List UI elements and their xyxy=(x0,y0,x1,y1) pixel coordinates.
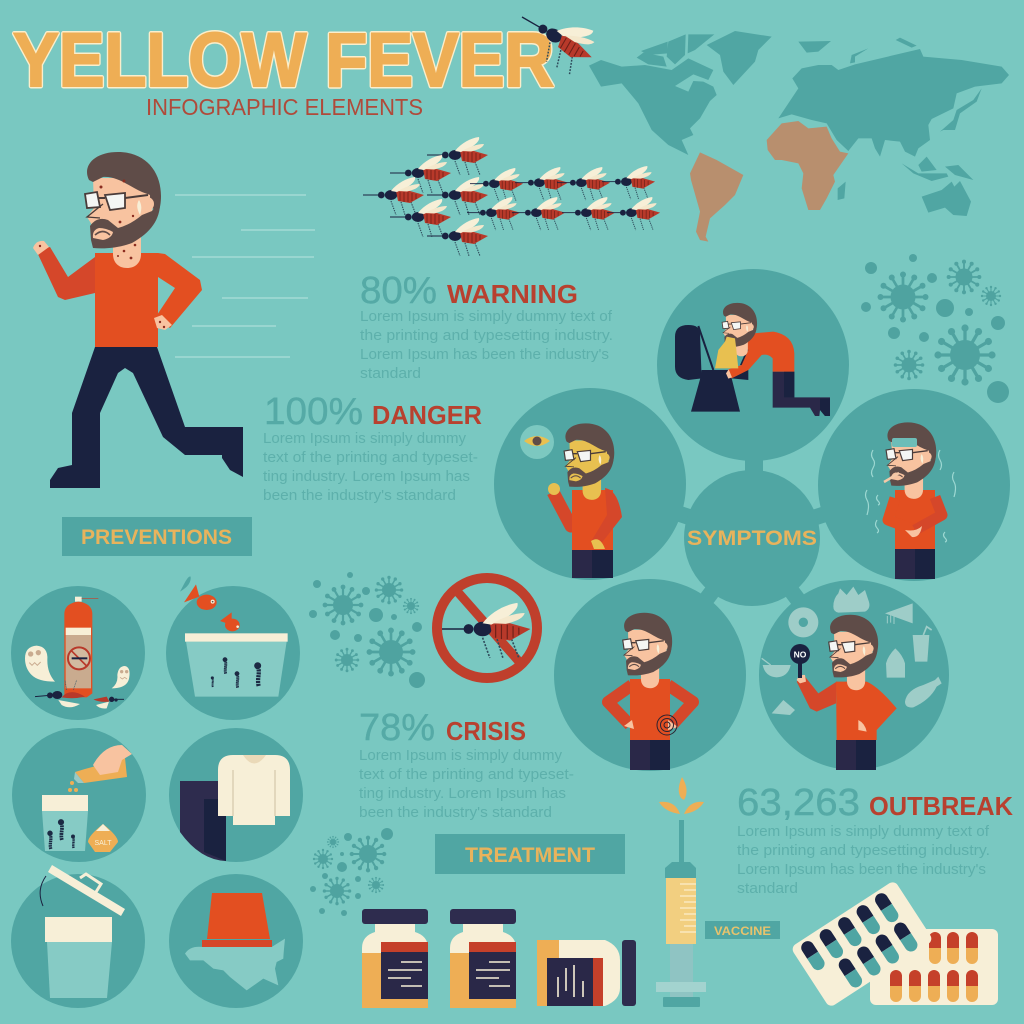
medicine jar 1 xyxy=(362,909,428,1008)
stat: warning: the printing and typesetting industry. xyxy=(360,327,613,344)
stat: crisis: ting industry. Lorem Ipsum has xyxy=(359,785,566,802)
stat: warning xyxy=(360,270,613,382)
heading: preventions: PREVENTIONS xyxy=(81,526,232,549)
heading: treatment xyxy=(435,834,625,874)
symptom: vomiting xyxy=(675,303,830,416)
virus cluster: top right xyxy=(861,254,1009,403)
running man with rash xyxy=(33,152,315,488)
icon: red pill blister pack xyxy=(870,929,998,1005)
stat: outbreak xyxy=(737,782,1013,897)
stat: outbreak: the printing and typesetting industry. xyxy=(737,842,990,859)
subtitle: INFOGRAPHIC ELEMENTS xyxy=(146,94,423,120)
stat: warning: 80% xyxy=(360,270,437,312)
stat: danger xyxy=(263,391,482,504)
stat: danger: been the industry's standard xyxy=(263,487,456,504)
icon: salt and oil in water glass xyxy=(42,745,132,852)
heading: symptoms: SYMPTOMS xyxy=(687,527,817,550)
stat: crisis: CRISIS xyxy=(446,716,526,746)
symptom: no appetite: NO xyxy=(794,650,807,660)
stat: crisis: been the industry's standard xyxy=(359,804,552,821)
panel: preventions xyxy=(11,576,303,1008)
stat: outbreak: Lorem Ipsum has been the industry's xyxy=(737,861,986,878)
icon: covered bin xyxy=(40,865,125,998)
icon: long clothes xyxy=(180,755,290,861)
medicine jar 2 xyxy=(450,909,516,1008)
label: vaccine xyxy=(705,921,780,939)
stat: danger: DANGER xyxy=(372,400,482,430)
heading: treatment: TREATMENT xyxy=(465,844,595,867)
mosquito swarm xyxy=(363,137,660,256)
stat: warning: Lorem Ipsum is simply dummy text of xyxy=(360,308,613,325)
stat: danger: 100% xyxy=(264,391,363,433)
world map xyxy=(589,31,1009,242)
medicine jar lying on side xyxy=(537,940,636,1006)
icon: title mosquito xyxy=(509,0,604,80)
icon: no mosquito sign xyxy=(437,578,537,678)
stat: outbreak: 63,263 xyxy=(737,782,860,824)
icon: insect spray xyxy=(25,597,130,709)
stat: danger: ting industry. Lorem Ipsum has xyxy=(263,468,470,485)
title: YELLOW FEVER xyxy=(13,18,554,103)
icon: vaccine syringe xyxy=(656,777,706,1007)
stat: outbreak: Lorem Ipsum is simply dummy text of xyxy=(737,823,990,840)
stat: crisis xyxy=(359,707,574,821)
icon: overturned bucket xyxy=(185,893,285,990)
stat: danger: Lorem Ipsum is simply dummy xyxy=(263,430,466,447)
icon: salt and oil in water glass: SALT xyxy=(94,840,112,847)
stat: outbreak: standard xyxy=(737,880,798,897)
stat: danger: text of the printing and typeset- xyxy=(263,449,478,466)
label: vaccine: VACCINE xyxy=(714,926,771,938)
symptom: no appetite xyxy=(762,587,942,770)
symptom: abdominal pain xyxy=(608,613,693,770)
symptoms diagram xyxy=(494,269,1010,771)
stat: warning: standard xyxy=(360,365,421,382)
icon: fish eating larvae in water container xyxy=(180,576,288,697)
stat: crisis: 78% xyxy=(359,707,435,749)
title: YELLOW FEVER xyxy=(13,18,554,103)
symptom: fever xyxy=(866,422,956,579)
forbidden food icons xyxy=(762,587,942,715)
stat: crisis: Lorem Ipsum is simply dummy xyxy=(359,747,562,764)
virus cluster: lower xyxy=(310,828,393,916)
stat: crisis: text of the printing and typeset- xyxy=(359,766,574,783)
stat: warning: WARNING xyxy=(447,279,578,309)
heading: preventions xyxy=(62,517,252,556)
stat: outbreak: OUTBREAK xyxy=(869,791,1013,821)
stat: warning: Lorem Ipsum has been the industry's xyxy=(360,346,609,363)
symptom: jaundice xyxy=(520,423,622,578)
icon: teal pill blister pack xyxy=(790,880,934,1008)
virus cluster: middle xyxy=(309,572,425,688)
